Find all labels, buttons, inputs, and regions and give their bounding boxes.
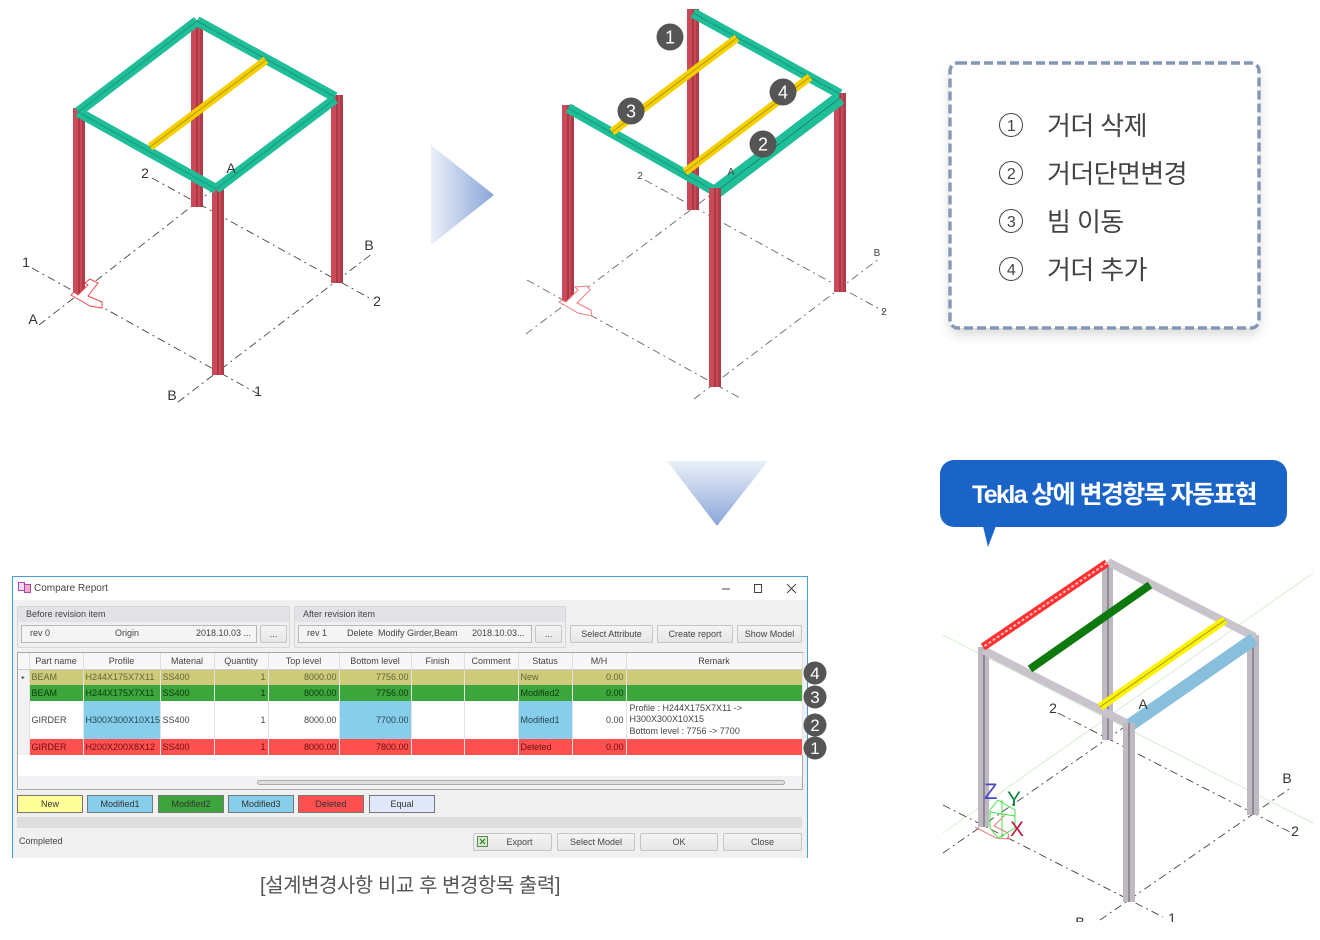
front column (1123, 723, 1135, 902)
legend items (1000, 111, 1187, 285)
comparison table: BEAM (32, 688, 57, 698)
grid labels: 2 (637, 171, 643, 182)
comparison table: Top level (286, 656, 321, 666)
comparison table: 8000.00 (304, 715, 336, 725)
legend: Modified1: Modified1 (100, 799, 140, 809)
window title: Compare Report (34, 583, 108, 594)
comparison table: SS400 (162, 672, 190, 682)
group: after revision (294, 606, 566, 648)
callout: Tekla auto display (940, 460, 1287, 547)
grid labels: B (1282, 770, 1292, 786)
button: Select Model (557, 833, 635, 851)
status legend (17, 795, 435, 813)
comparison table: Status (532, 656, 558, 666)
origin marker and axes: Y (1007, 788, 1021, 811)
legend items: 거더 삭제 (1047, 111, 1147, 141)
legend: Equal: Equal (390, 799, 414, 809)
data grid (17, 652, 803, 790)
arrow: down (667, 461, 768, 526)
comparison table: Modified1 (520, 715, 560, 725)
legend: Deleted (298, 795, 364, 813)
legend items: 1 (1007, 118, 1016, 135)
comparison table: 0.00 (606, 742, 624, 752)
deleted girder: red (983, 563, 1107, 647)
table row badges: 4 (810, 664, 820, 683)
columns (978, 562, 1259, 827)
comparison table: H244X175X7X11 (86, 672, 154, 682)
comparison table: 7756.00 (376, 688, 408, 698)
number badges (618, 24, 796, 158)
legend items: 4 (1007, 262, 1016, 279)
number badges: 2 (758, 134, 768, 154)
legend: Modified2 (158, 795, 224, 813)
grid labels: 2 (1049, 700, 1057, 716)
comparison table: H300X300X10X15 (86, 715, 160, 725)
group: before revision: ... (270, 629, 277, 639)
legend: Modified2: Modified2 (171, 799, 211, 809)
comparison table: Quantity (224, 656, 258, 666)
icon: report (18, 582, 31, 593)
comparison table: H300X300X10X15 (630, 714, 704, 724)
comparison table: New (520, 672, 539, 682)
comparison table: BEAM (32, 672, 57, 682)
button: Close: Close (751, 837, 774, 847)
icon: excel (477, 836, 488, 847)
caption: [설계변경사항 비교 후 변경항목 출력] (260, 875, 560, 897)
comparison table: 0.00 (606, 688, 624, 698)
comparison table: 8000.00 (304, 688, 336, 698)
button: Select Model: Select Model (570, 837, 622, 847)
grid labels: 2 (373, 293, 381, 309)
comparison table: Bottom level (350, 656, 400, 666)
number badges: 1 (665, 28, 675, 48)
status text: Completed (19, 836, 63, 846)
legend: Modified3 (228, 795, 294, 813)
group: before revision: Origin (115, 628, 139, 638)
group: after revision: ... (545, 629, 552, 639)
group: after revision: rev 1 (307, 628, 327, 638)
comparison table: GIRDER (32, 715, 67, 725)
grid labels: 2 (1291, 823, 1299, 839)
comparison table: Profile (109, 656, 134, 666)
button: Create report: Create report (668, 629, 722, 639)
grid labels: A (28, 311, 38, 327)
legend: Equal (369, 795, 435, 813)
comparison table: ▸ (22, 675, 25, 681)
grid labels (637, 167, 887, 318)
grid labels (22, 160, 381, 403)
horizontal scrollbar (18, 776, 802, 789)
comparison table: Remark (698, 656, 730, 666)
grid labels: 1 (254, 383, 262, 399)
origin marker (559, 286, 592, 316)
girders (78, 21, 335, 189)
legend: Modified1 (87, 795, 153, 813)
button: Export: Export (506, 837, 532, 847)
number badges: 3 (626, 102, 636, 122)
comparison table: 7800.00 (376, 742, 408, 752)
comparison table: Deleted (520, 742, 552, 752)
panel: Compare Report window (12, 576, 808, 858)
legend items: 빔 이동 (1047, 207, 1124, 237)
comparison table: Bottom level : 7756 -> 7700 (630, 726, 740, 736)
comparison table: SS400 (162, 715, 190, 725)
comparison table: SS400 (162, 742, 190, 752)
button: OK: OK (672, 837, 686, 847)
button: Show Model: Show Model (745, 629, 794, 639)
comparison table: SS400 (162, 688, 190, 698)
legend: Modified3: Modified3 (241, 799, 281, 809)
button: Export (473, 833, 552, 851)
group: after revision: Delete Modify Girder,Beam (347, 628, 458, 638)
grid labels (1049, 696, 1299, 930)
comparison table: 0.00 (606, 715, 624, 725)
comparison table: GIRDER (32, 742, 67, 752)
grid labels: A (226, 160, 236, 176)
group: before revision: 2018.10.03 ... (196, 628, 251, 638)
comparison table: 7700.00 (376, 715, 408, 725)
girders (568, 13, 840, 191)
grid labels: 1 (22, 254, 30, 270)
window controls (722, 584, 796, 594)
grid labels: 2 (881, 307, 887, 318)
button: OK (640, 833, 718, 851)
comparison table: 0.00 (606, 672, 624, 682)
grid labels: A (728, 167, 735, 178)
table row badges (804, 662, 826, 760)
origin marker and axes: X (1010, 818, 1024, 841)
legend items: 2 (1007, 166, 1016, 183)
comparison table: H200X200X8X12 (86, 742, 155, 752)
origin marker and axes: Z (984, 779, 997, 804)
beams: yellow (612, 38, 810, 172)
group: after revision: 2018.10.03... (472, 628, 525, 638)
columns (562, 9, 846, 305)
comparison table: Profile : H244X175X7X11 -> (630, 703, 742, 713)
grid lines (32, 178, 373, 402)
grid labels: A (1138, 696, 1148, 712)
origin marker (71, 279, 102, 308)
columns (73, 20, 343, 375)
modified girder: blue (1130, 639, 1254, 725)
grey girders (983, 562, 1255, 725)
comparison table: 1 (260, 688, 266, 698)
grid labels: B (364, 237, 374, 253)
button: Select Attribute: Select Attribute (581, 629, 642, 639)
group: before revision: rev 0 (30, 628, 50, 638)
panel: change legend (945, 61, 1264, 339)
legend: Deleted: Deleted (315, 799, 347, 809)
moved beam: green (1030, 585, 1150, 669)
button: Show Model (737, 625, 802, 643)
comparison table (18, 653, 803, 755)
progress bar (17, 817, 802, 828)
beam: yellow (150, 60, 266, 147)
table row badges: 3 (810, 688, 820, 707)
legend: New (17, 795, 83, 813)
comparison table: 1 (260, 672, 266, 682)
diagram: revised frame model (526, 8, 887, 400)
table row badges: 2 (810, 716, 820, 735)
comparison table: 1 (260, 715, 266, 725)
button: Select Attribute (570, 625, 653, 643)
green axis lines (943, 573, 1313, 833)
comparison table: 7756.00 (376, 672, 408, 682)
legend items: 거더단면변경 (1047, 159, 1187, 189)
callout: Tekla auto display: Tekla 상에 변경항목 자동표현 (972, 481, 1256, 509)
front column (709, 188, 721, 387)
comparison table: Material (171, 656, 203, 666)
grid lines (526, 180, 885, 399)
title bar (13, 577, 807, 600)
comparison table: M/H (591, 656, 607, 666)
comparison table: Finish (425, 656, 450, 666)
legend items: 거더 추가 (1047, 255, 1148, 285)
group: after revision: After revision item (303, 609, 375, 619)
comparison table: Part name (35, 656, 77, 666)
comparison table: Modified2 (520, 688, 560, 698)
diagram: original frame model (22, 16, 381, 403)
comparison table: 8000.00 (304, 672, 336, 682)
number badges: 4 (778, 82, 788, 102)
diagram: Tekla model with changes coloured (942, 558, 1314, 922)
arrow: right (431, 145, 494, 245)
comparison table: H244X175X7X11 (86, 688, 154, 698)
comparison table: Comment (471, 656, 510, 666)
comparison table: 8000.00 (304, 742, 336, 752)
grid labels: B (167, 387, 177, 403)
grid lines (943, 713, 1292, 920)
origin marker and axes (975, 779, 1024, 841)
legend items: 3 (1007, 214, 1016, 231)
new beam: yellow (1100, 620, 1225, 707)
group: before revision (17, 606, 290, 648)
grid labels: 2 (141, 165, 149, 181)
legend: New: New (41, 799, 59, 809)
button: Close (723, 833, 802, 851)
group: before revision: Before revision item (26, 609, 106, 619)
button: Create report (657, 625, 733, 643)
table row badges: 1 (810, 739, 820, 758)
grid labels: B (874, 248, 881, 259)
comparison table: 1 (260, 742, 266, 752)
